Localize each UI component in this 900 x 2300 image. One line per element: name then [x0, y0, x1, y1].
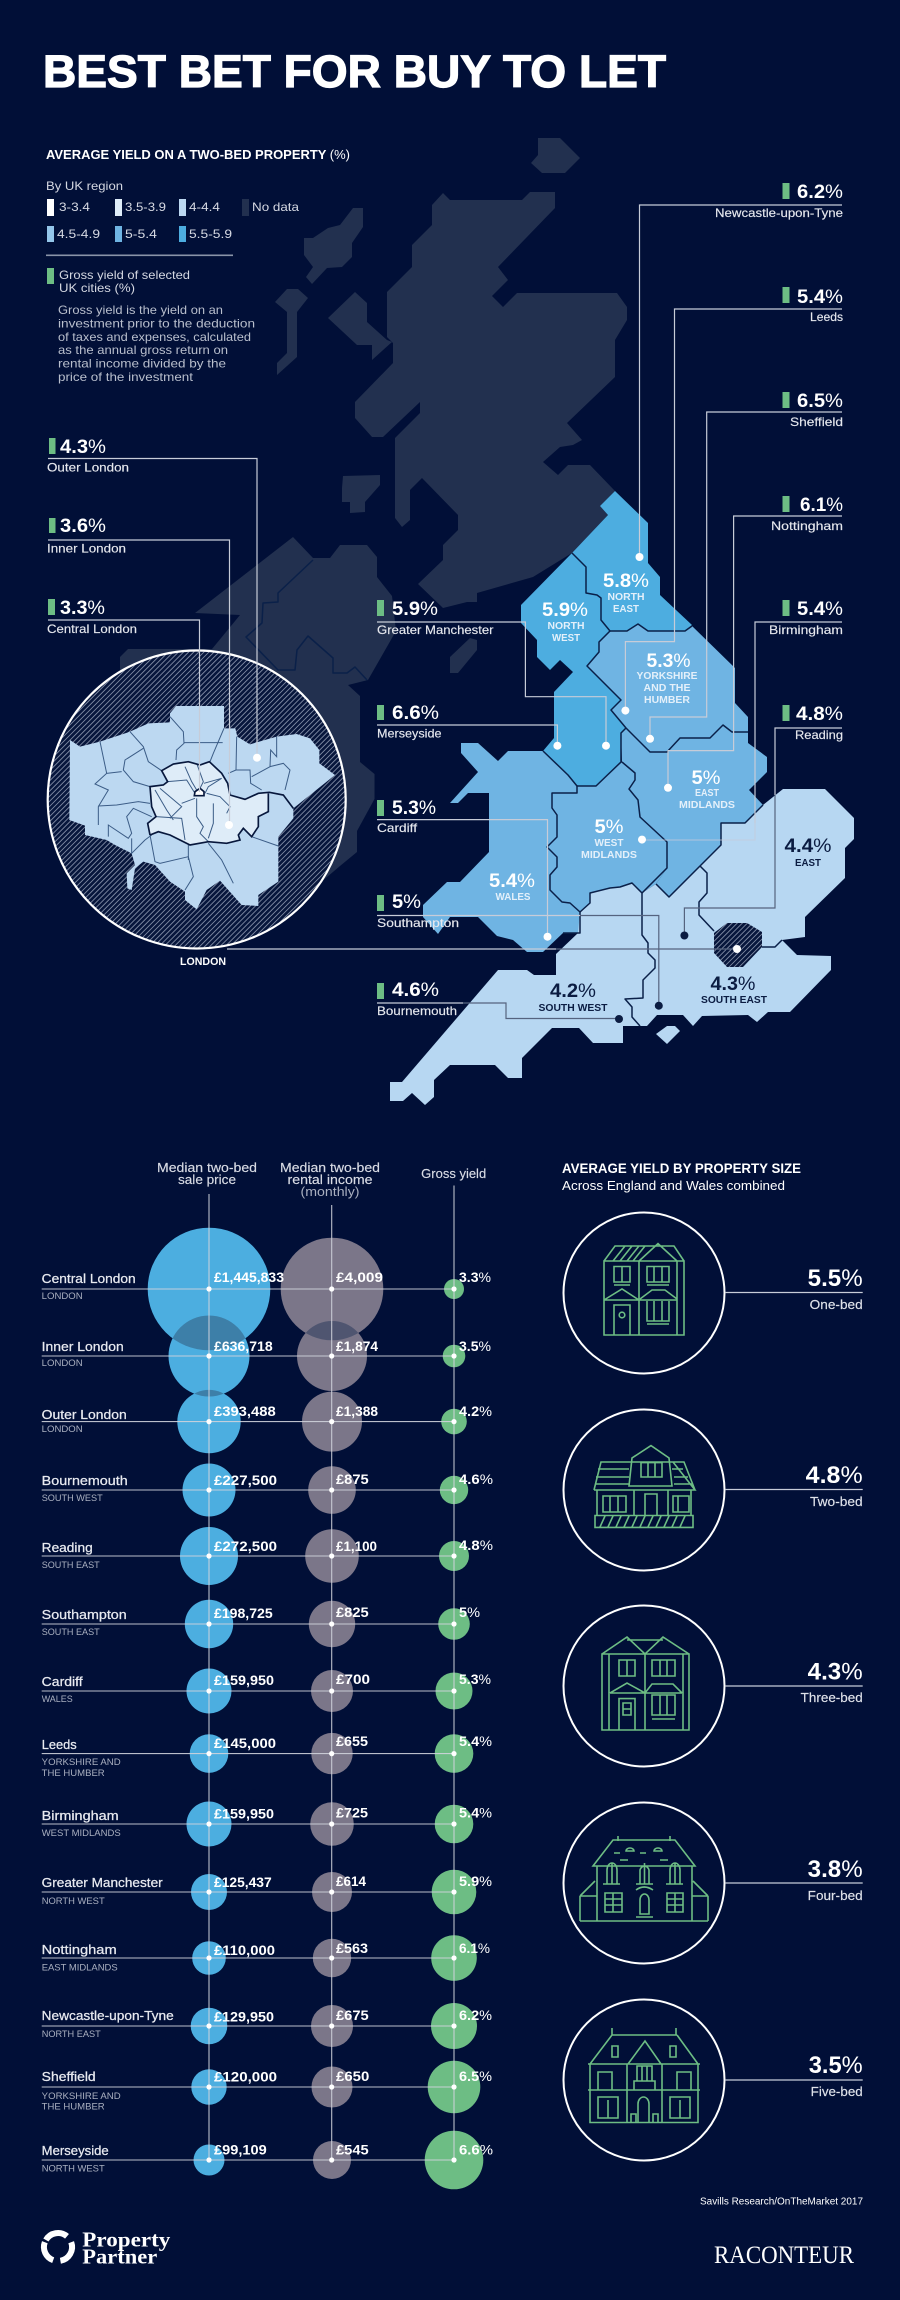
- property: four-bed: [564, 1802, 863, 1964]
- panel: yield by property size: [562, 1161, 863, 2160]
- row: Reading: SOUTH EAST: [42, 1560, 100, 1571]
- callout: Birmingham: [769, 599, 843, 637]
- callout: Merseyside: [377, 703, 442, 740]
- row: Birmingham: [42, 1804, 492, 1839]
- legend: gross yield key: [47, 268, 190, 295]
- map: Scotland and Ireland, no data: [120, 138, 627, 900]
- row: Cardiff: 5.3%: [459, 1671, 491, 1687]
- label: North East: EAST: [613, 603, 640, 615]
- row: Nottingham: Nottingham: [42, 1942, 117, 1957]
- label: Yorkshire and the Humber: HUMBER: [644, 694, 690, 706]
- legend: gross yield key: UK cities (%): [59, 281, 135, 295]
- row: Sheffield: YORKSHIRE AND: [42, 2091, 121, 2102]
- row: Leeds: Leeds: [42, 1737, 77, 1752]
- row: Merseyside: 6.6%: [459, 2142, 493, 2158]
- property: three-bed: [564, 1606, 863, 1766]
- callout: Greater Manchester: [377, 599, 494, 637]
- icon: five-bed house: [588, 2028, 700, 2122]
- logo: Property Partner: Partner: [82, 2245, 157, 2269]
- callout: Newcastle-upon-Tyne: [715, 182, 843, 220]
- row: Southampton: 5%: [459, 1604, 480, 1620]
- London circle with hatching: [48, 650, 346, 948]
- callout: Birmingham: 5.4%: [797, 599, 843, 620]
- row: Leeds: £655: [336, 1733, 368, 1749]
- label: North West: WEST: [552, 632, 581, 644]
- row: Newcastle-upon-Tyne: £129,950: [214, 2008, 274, 2024]
- row: Southampton: £198,725: [214, 1605, 273, 1621]
- row: Bournemouth: SOUTH WEST: [42, 1493, 103, 1504]
- row: Outer London: Outer London: [42, 1407, 127, 1422]
- label: South East: 4.3%: [710, 974, 756, 995]
- label: South West: 4.2%: [550, 981, 596, 1002]
- callout dots: [225, 553, 741, 1023]
- city callouts: middle: [377, 599, 494, 1018]
- label: South East: SOUTH EAST: [701, 994, 768, 1006]
- callout: Central London: [47, 598, 137, 636]
- label: West Midlands: MIDLANDS: [581, 849, 637, 861]
- label: North East: [603, 571, 649, 615]
- value: three-bed: 4.3%: [808, 1658, 863, 1685]
- row: Bournemouth: [42, 1471, 493, 1504]
- callout: Bournemouth: [377, 980, 457, 1018]
- label: Yorkshire and the Humber: 5.3%: [646, 651, 691, 672]
- property: five-bed: [564, 2000, 863, 2160]
- row: Nottingham: EAST MIDLANDS: [42, 1963, 118, 1974]
- icon: one-bed door knob: [619, 1312, 625, 1318]
- callout lines: [48, 205, 842, 1018]
- row: Central London: £1,445,833: [214, 1269, 284, 1285]
- legend heading: AVERAGE YIELD ON A TWO-BED PROPERTY (%): [46, 148, 350, 162]
- callout: Central London: 3.3%: [60, 598, 105, 619]
- callout: Southampton: [377, 892, 459, 930]
- icon: one-bed house: [604, 1244, 684, 1335]
- title: BEST BET FOR BUY TO LET: [43, 46, 666, 97]
- map: England and Wales regions: [390, 491, 854, 1105]
- label: Yorkshire and the Humber: AND THE: [644, 682, 690, 694]
- row: Greater Manchester: NORTH WEST: [42, 1896, 105, 1907]
- logo: Raconteur: RACONTEUR: [714, 2242, 854, 2269]
- callout: Nottingham: [771, 495, 843, 533]
- callout: Southampton: Southampton: [377, 916, 459, 930]
- callout: Merseyside: Merseyside: [377, 726, 442, 740]
- column headers: rental income: [288, 1173, 373, 1187]
- row: Merseyside: Merseyside: [42, 2143, 109, 2158]
- row: Outer London: [42, 1403, 492, 1435]
- label: North East: NORTH: [608, 591, 644, 603]
- source note: Savills Research/OnTheMarket 2017: [700, 2197, 863, 2208]
- caption: one-bed: One-bed: [810, 1297, 863, 1312]
- region: East: [699, 789, 854, 947]
- central London: [194, 788, 204, 796]
- city callouts: right: [715, 182, 843, 742]
- row: Sheffield: THE HUMBER: [42, 2102, 105, 2112]
- row: Greater Manchester: £125,437: [214, 1874, 272, 1890]
- callout: Bournemouth: 4.6%: [392, 980, 439, 1001]
- row: Inner London: Inner London: [42, 1339, 124, 1354]
- row: Central London: [42, 1269, 491, 1302]
- bubble chart: [42, 1161, 493, 2189]
- row: Sheffield: Sheffield: [42, 2069, 96, 2084]
- callout: Sheffield: 6.5%: [797, 391, 843, 412]
- London label: LONDON: [180, 956, 226, 968]
- callout: Greater Manchester: Greater Manchester: [377, 623, 494, 637]
- icon: Property Partner swirl: [44, 2233, 72, 2261]
- row: Birmingham: 5.4%: [459, 1804, 492, 1820]
- label: East: EAST: [795, 857, 822, 869]
- callout: Leeds: Leeds: [810, 310, 843, 324]
- label: North West: [542, 600, 588, 644]
- label: East Midlands: [679, 768, 735, 811]
- label: North East: 5.8%: [603, 571, 649, 592]
- property: two-bed: [564, 1410, 863, 1570]
- caption: five-bed: Five-bed: [811, 2084, 863, 2099]
- region: North East: [572, 491, 692, 631]
- legend sub-heading: By UK region: [46, 179, 123, 193]
- chart dots: [206, 1286, 457, 2163]
- label: East: 4.4%: [784, 836, 832, 857]
- rental income bubbles: [281, 1238, 383, 2179]
- callout: Nottingham: 6.1%: [800, 495, 843, 516]
- map: Northern Ireland border: [246, 560, 367, 680]
- row: Outer London: LONDON: [42, 1424, 83, 1435]
- icon: two-bed house: [594, 1446, 695, 1527]
- sale price bubbles: [148, 1228, 270, 2176]
- logo: Property Partner: [44, 2228, 171, 2269]
- legend swatches: 3.5-3.9: [125, 200, 166, 214]
- column headers: [157, 1161, 486, 1199]
- label: Yorkshire and the Humber: [636, 651, 698, 706]
- row: Reading: Reading: [42, 1540, 93, 1555]
- row: Sheffield: £650: [336, 2068, 370, 2084]
- row: Southampton: Southampton: [42, 1607, 127, 1622]
- legend swatches: [47, 199, 299, 242]
- callout: Merseyside: 6.6%: [392, 703, 439, 724]
- row: Sheffield: £120,000: [214, 2068, 277, 2084]
- row: Nottingham: [42, 1940, 490, 1974]
- label: West Midlands: 5%: [594, 817, 624, 838]
- row: Southampton: [42, 1604, 480, 1638]
- callout: Cardiff: [377, 798, 436, 835]
- label: South West: [538, 981, 608, 1014]
- legend: gross yield key: Gross yield of selected: [59, 268, 190, 282]
- legend swatches: No data: [252, 200, 299, 214]
- row: Bournemouth: 4.6%: [459, 1471, 493, 1487]
- legend swatches: 4.5-4.9: [57, 227, 100, 241]
- icon: three-bed house: [602, 1637, 689, 1730]
- row: Cardiff: Cardiff: [42, 1674, 83, 1689]
- label: East: [784, 836, 832, 869]
- row: Greater Manchester: Greater Manchester: [42, 1875, 163, 1890]
- label: Wales: WALES: [496, 891, 530, 903]
- chart axes and row lines: [42, 1186, 454, 2160]
- callout: Reading: Reading: [795, 728, 843, 742]
- borough boundaries: [95, 717, 290, 890]
- row: Inner London: £636,718: [214, 1338, 273, 1354]
- map: region borders: [543, 553, 782, 1026]
- label: Yorkshire and the Humber: YORKSHIRE: [636, 670, 698, 682]
- row: Cardiff: WALES: [42, 1694, 73, 1705]
- gross yield bubbles: [425, 1279, 483, 2189]
- row: Bournemouth: £875: [336, 1471, 369, 1487]
- row: Newcastle-upon-Tyne: 6.2%: [459, 2007, 492, 2023]
- callout: Sheffield: [782, 391, 843, 429]
- callout: Leeds: 5.4%: [797, 287, 843, 308]
- row: Cardiff: £700: [336, 1671, 370, 1687]
- legend swatches: 3-3.4: [59, 200, 90, 214]
- row: Newcastle-upon-Tyne: NORTH EAST: [42, 2029, 101, 2040]
- gross yield explanation: [58, 303, 255, 384]
- property: one-bed: [564, 1212, 863, 1374]
- label: East Midlands: 5%: [692, 768, 721, 789]
- row: Birmingham: £159,950: [214, 1806, 274, 1822]
- legend swatches: 5-5.4: [125, 227, 157, 241]
- row: Merseyside: NORTH WEST: [42, 2164, 105, 2174]
- label: North West: NORTH: [548, 620, 584, 632]
- inner London south boundary: [150, 793, 268, 845]
- row: Leeds: THE HUMBER: [42, 1768, 105, 1779]
- outer London: [69, 706, 335, 909]
- region: South East: [625, 866, 831, 1026]
- callout: Nottingham: Nottingham: [771, 519, 843, 533]
- callout: Bournemouth: Bournemouth: [377, 1004, 457, 1018]
- row: Sheffield: [42, 2068, 492, 2112]
- gross yield explanation: Gross yield is the yield on an: [58, 303, 223, 317]
- column headers: Gross yield: [421, 1167, 486, 1181]
- value: one-bed: 5.5%: [808, 1265, 863, 1292]
- region: London: [714, 923, 762, 967]
- row: Nottingham: 6.1%: [459, 1940, 490, 1956]
- panel heading: AVERAGE YIELD BY PROPERTY SIZE: [562, 1161, 801, 1176]
- callout: Greater Manchester: 5.9%: [392, 599, 438, 620]
- callout: Outer London: 4.3%: [60, 437, 106, 458]
- label: West Midlands: WEST: [594, 837, 624, 849]
- label: Wales: 5.4%: [489, 871, 535, 892]
- callout: Reading: 4.8%: [796, 704, 843, 725]
- label: East Midlands: MIDLANDS: [679, 799, 735, 811]
- row: Newcastle-upon-Tyne: £675: [336, 2007, 369, 2023]
- column headers: (monthly): [300, 1185, 360, 1199]
- gross yield explanation: of taxes and expenses, calculated: [58, 330, 251, 344]
- row: Southampton: SOUTH EAST: [42, 1627, 100, 1638]
- London boroughs: [69, 706, 335, 909]
- row: Birmingham: Birmingham: [42, 1808, 119, 1823]
- row: Merseyside: [42, 2142, 493, 2174]
- callout: Newcastle-upon-Tyne: 6.2%: [797, 182, 843, 203]
- row: Merseyside: £545: [336, 2142, 369, 2158]
- wordmark: Property: [82, 2228, 171, 2252]
- row: Newcastle-upon-Tyne: [42, 2007, 492, 2040]
- row: Outer London: 4.2%: [459, 1403, 492, 1419]
- region: Wales: [423, 743, 580, 952]
- column headers: sale price: [178, 1173, 236, 1187]
- row: Leeds: YORKSHIRE AND: [42, 1757, 121, 1768]
- row: Central London: LONDON: [42, 1291, 83, 1302]
- row: Greater Manchester: £614: [336, 1873, 366, 1889]
- label: West Midlands: [581, 817, 637, 861]
- callout: Newcastle-upon-Tyne: Newcastle-upon-Tyne: [715, 206, 843, 220]
- region: Isle of Wight: [656, 1026, 680, 1044]
- caption: three-bed: Three-bed: [801, 1690, 863, 1705]
- row: Inner London: £1,874: [336, 1338, 378, 1354]
- callout: Southampton: 5%: [392, 892, 421, 913]
- row: Central London: 3.3%: [459, 1269, 491, 1285]
- row: Reading: 4.8%: [459, 1537, 493, 1553]
- label: North West: 5.9%: [542, 600, 588, 621]
- gross yield explanation: rental income divided by the: [58, 356, 226, 370]
- inner London boundary: [148, 762, 293, 835]
- gross yield explanation: price of the investment: [58, 370, 194, 384]
- label: East Midlands: EAST: [695, 787, 719, 799]
- row: Merseyside: £99,109: [214, 2142, 267, 2158]
- value: five-bed: 3.5%: [809, 2052, 863, 2079]
- caption: two-bed: Two-bed: [810, 1494, 863, 1509]
- row: Leeds: [42, 1733, 492, 1779]
- row: Greater Manchester: [42, 1873, 492, 1907]
- column headers: Median two-bed: [157, 1161, 257, 1175]
- callout: Sheffield: Sheffield: [790, 415, 843, 429]
- region: North West: [521, 553, 626, 786]
- London inset map: [48, 650, 346, 968]
- row: Inner London: LONDON: [42, 1358, 83, 1369]
- callout: Outer London: Outer London: [47, 460, 129, 474]
- icon: four-bed house: [580, 1836, 708, 1921]
- column headers: Median two-bed: [280, 1161, 380, 1175]
- region: South West: [390, 883, 655, 1105]
- callout: Inner London: Inner London: [47, 542, 126, 556]
- row: Newcastle-upon-Tyne: Newcastle-upon-Tyne: [42, 2008, 174, 2023]
- callout: Cardiff: Cardiff: [377, 821, 418, 835]
- row: Cardiff: £159,950: [214, 1672, 274, 1688]
- callout: Inner London: 3.6%: [60, 516, 106, 537]
- row: Bournemouth: £227,500: [214, 1472, 277, 1488]
- callout: Birmingham: Birmingham: [769, 623, 843, 637]
- gross yield explanation: investment prior to the deduction: [58, 316, 255, 330]
- caption: four-bed: Four-bed: [808, 1888, 863, 1903]
- region: West Midlands: [547, 762, 667, 912]
- row: Sheffield: 6.5%: [459, 2068, 492, 2084]
- region labels: [489, 571, 832, 1014]
- label: Wales: [489, 871, 535, 903]
- legend swatches: 5.5-5.9: [189, 227, 232, 241]
- row: Inner London: [42, 1338, 491, 1369]
- row: Leeds: £145,000: [214, 1735, 276, 1751]
- row: Reading: £1,100: [336, 1538, 377, 1554]
- value: two-bed: 4.8%: [806, 1462, 863, 1489]
- value: four-bed: 3.8%: [808, 1856, 863, 1883]
- row: Birmingham: WEST MIDLANDS: [42, 1828, 121, 1839]
- row: Outer London: £393,488: [214, 1403, 276, 1419]
- gross yield explanation: as the annual gross return on: [58, 343, 228, 357]
- legend: [46, 148, 350, 384]
- legend divider: [46, 254, 233, 256]
- region: East Midlands: [621, 725, 767, 897]
- row: Reading: [42, 1537, 493, 1571]
- row: Birmingham: £725: [336, 1804, 368, 1820]
- legend swatches: 4-4.4: [189, 200, 220, 214]
- city callouts: London: [47, 437, 137, 636]
- row: Central London: Central London: [42, 1271, 136, 1286]
- row: Reading: £272,500: [214, 1538, 277, 1554]
- label: South East: [701, 974, 768, 1006]
- row: Outer London: £1,388: [336, 1403, 378, 1419]
- callout: Inner London: [47, 516, 126, 556]
- row: Nottingham: £563: [336, 1940, 368, 1956]
- callout: Outer London: [47, 437, 129, 474]
- row: Inner London: 3.5%: [459, 1338, 491, 1354]
- row: Southampton: £825: [336, 1604, 369, 1620]
- row: Cardiff: [42, 1671, 491, 1705]
- row: Nottingham: £110,000: [214, 1942, 275, 1958]
- callout: Central London: Central London: [47, 622, 137, 636]
- callout: Leeds: [782, 287, 843, 324]
- row: Central London: £4,009: [336, 1269, 383, 1285]
- callout: Cardiff: 5.3%: [392, 798, 436, 819]
- row: Greater Manchester: 5.9%: [459, 1873, 492, 1889]
- callout: Reading: [782, 704, 843, 742]
- panel sub-heading: Across England and Wales combined: [562, 1179, 785, 1193]
- row: Leeds: 5.4%: [459, 1733, 492, 1749]
- label: South West: SOUTH WEST: [538, 1002, 608, 1014]
- row: Bournemouth: Bournemouth: [42, 1473, 128, 1488]
- inner London: [148, 762, 268, 845]
- region: Yorkshire and the Humber: [587, 624, 748, 752]
